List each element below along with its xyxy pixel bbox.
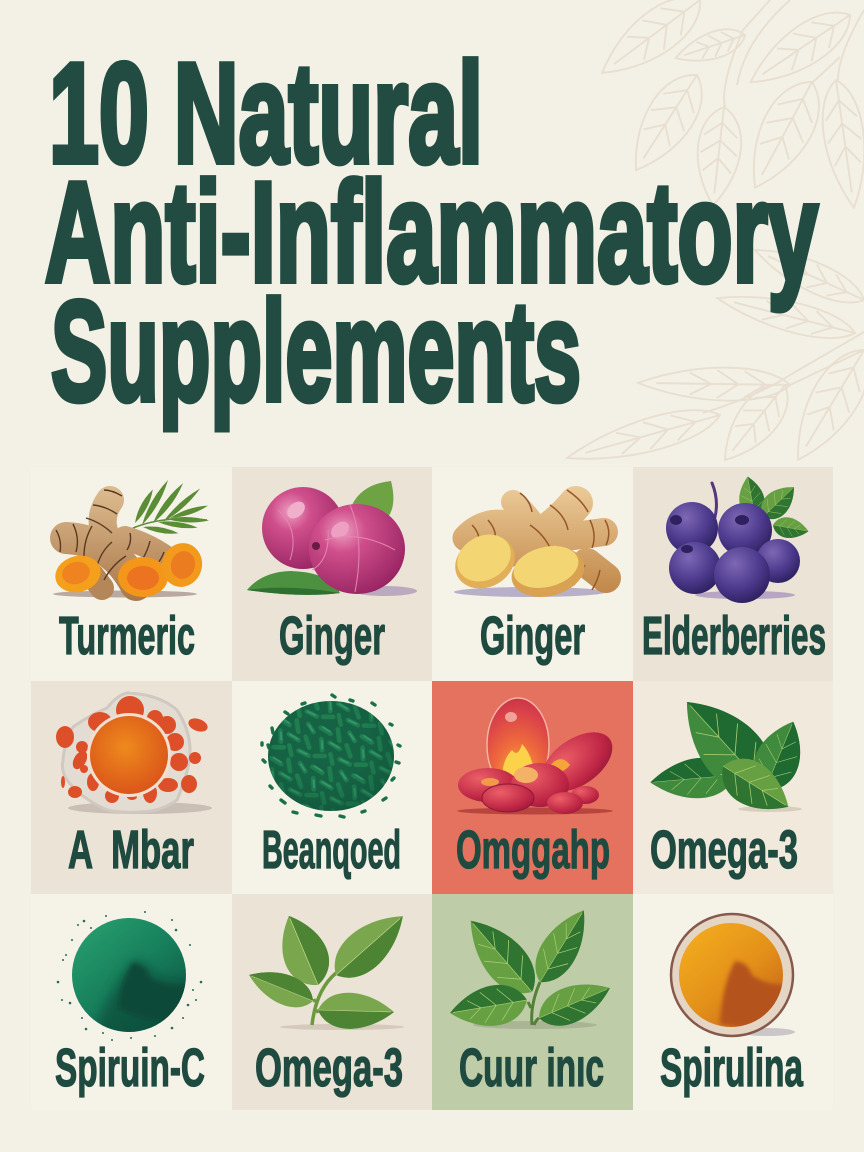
icon: elderberries: [666, 474, 810, 603]
panel: curcumin leaves: [432, 894, 633, 1110]
icon: green leaves: [447, 901, 617, 1035]
panel: omega-3 leaves: [232, 894, 432, 1110]
label: Ginger: Ginger: [480, 606, 585, 666]
label: Spiruin-C: Spiruin-C: [55, 1038, 205, 1098]
title: [45, 34, 818, 431]
label: Omggahp: Omggahp: [456, 820, 610, 880]
icon: green granule pile: [262, 695, 400, 817]
panel: green pile: [232, 681, 432, 894]
label: Omega-3: Omega-3: [255, 1038, 403, 1098]
icon: mint leaves: [649, 682, 813, 825]
icon: green powder mound: [57, 911, 202, 1041]
label: A Mbar: A Mbar: [68, 820, 194, 880]
icon: bowl of orange powder: [671, 914, 795, 1036]
panel: amber bowl: [31, 681, 232, 894]
icon: turmeric roots: [51, 490, 207, 598]
panel: ginger, pink: [232, 467, 432, 681]
label: Turmeric: Turmeric: [59, 606, 195, 666]
label: Ginger: Ginger: [279, 606, 385, 666]
panel: omega capsules: [432, 681, 633, 894]
label: Cuur inıc: Cuur inıc: [459, 1038, 604, 1098]
icon: orange powder dish: [56, 693, 212, 814]
panel: spirulina bowl: [660, 912, 804, 1098]
title: 10 Natural: [49, 34, 483, 193]
panel: ginger, yellow: [432, 467, 633, 681]
panel: spirulina powder: [56, 911, 204, 1098]
panel: turmeric: [31, 467, 232, 681]
panel: omega-3 mint: [633, 681, 833, 894]
icon: red capsules: [457, 698, 623, 814]
panel: elderberries: [633, 467, 833, 681]
label: Beanqoed: Beanɋoed: [262, 820, 401, 880]
icon: ginger root: [446, 490, 609, 604]
icon: green sprig: [243, 901, 416, 1030]
icon: rosemary sprig: [132, 478, 209, 536]
icon: pink fruit: [247, 481, 417, 596]
background botanical leaves: [562, 0, 864, 474]
